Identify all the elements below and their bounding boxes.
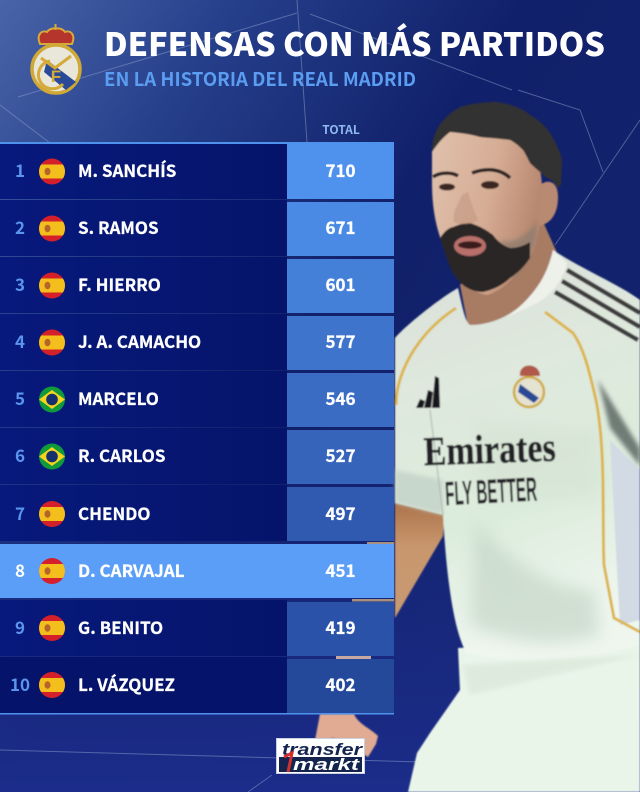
subtitle: EN LA HISTORIA DEL REAL MADRID bbox=[104, 65, 416, 92]
beard bbox=[440, 223, 530, 292]
row 1: 710 bbox=[325, 157, 356, 182]
row 6 bbox=[0, 428, 394, 484]
sleeve seam bbox=[430, 410, 443, 515]
row 6: 6 bbox=[15, 442, 25, 467]
stubble bbox=[500, 222, 537, 280]
row 4: J. A. CAMACHO bbox=[78, 328, 201, 353]
adidas logo bbox=[416, 376, 440, 408]
row 3: F. HIERRO bbox=[78, 271, 161, 296]
shoulder stripes bbox=[555, 270, 640, 340]
jersey trim bbox=[396, 308, 640, 632]
row 10: 402 bbox=[325, 671, 356, 696]
row 7: 7 bbox=[15, 500, 25, 525]
nose shadow bbox=[454, 192, 478, 224]
ear bbox=[536, 182, 558, 226]
row 1: M. SANCHÍS bbox=[78, 157, 176, 182]
row 3 bbox=[0, 257, 394, 313]
row 9: 419 bbox=[325, 614, 356, 639]
row 4: 577 bbox=[325, 328, 356, 353]
crown bbox=[39, 24, 73, 44]
row 8: highlighted bbox=[0, 544, 394, 598]
eyes bbox=[439, 184, 455, 190]
collar bbox=[505, 250, 567, 318]
transfermarkt logo bbox=[276, 738, 364, 774]
row 9: 9 bbox=[15, 614, 25, 639]
row 1: 1 bbox=[15, 157, 25, 182]
title: DEFENSAS CON MÁS PARTIDOS bbox=[104, 20, 605, 66]
neck bbox=[460, 215, 558, 326]
row 3: 3 bbox=[15, 271, 25, 296]
ranking table bbox=[0, 142, 394, 714]
row 6: R. CARLOS bbox=[78, 442, 166, 467]
row 7: CHENDO bbox=[78, 500, 150, 525]
row 9 bbox=[0, 600, 394, 656]
eyebrows bbox=[433, 170, 510, 178]
row 2 bbox=[0, 200, 394, 256]
row 7 bbox=[0, 485, 394, 541]
row 10: 10 bbox=[10, 671, 30, 696]
row 8: highlighted: 451 bbox=[325, 557, 356, 582]
row 5 bbox=[0, 371, 394, 427]
sleeve shading bbox=[395, 470, 443, 515]
row 5: MARCELO bbox=[78, 385, 159, 410]
row 2: S. RAMOS bbox=[78, 214, 159, 239]
hair bbox=[432, 102, 562, 188]
column heading: total: TOTAL bbox=[322, 121, 360, 138]
row 4: 4 bbox=[15, 328, 25, 353]
jersey bbox=[395, 250, 640, 660]
row 3: 601 bbox=[325, 271, 356, 296]
jersey soft shading bbox=[470, 520, 600, 642]
player photo bbox=[315, 102, 640, 792]
crest: Real Madrid logo: F bbox=[51, 67, 61, 86]
row 8: highlighted: D. CARVAJAL bbox=[78, 557, 185, 582]
row 10: L. VÁZQUEZ bbox=[78, 671, 175, 696]
jersey crest bbox=[514, 366, 544, 407]
sponsor: Emirates bbox=[423, 424, 556, 474]
shorts bbox=[408, 640, 640, 792]
row 8: highlighted: 8 bbox=[15, 557, 25, 582]
transfermarkt logo: transfer bbox=[282, 740, 364, 759]
arm bbox=[395, 498, 445, 618]
row 2: 2 bbox=[15, 214, 25, 239]
row 1 bbox=[0, 143, 394, 199]
row 4 bbox=[0, 314, 394, 370]
row 9: G. BENITO bbox=[78, 614, 163, 639]
head bbox=[432, 120, 542, 295]
mouth bbox=[454, 236, 486, 256]
row 2: 671 bbox=[325, 214, 356, 239]
row 10 bbox=[0, 657, 394, 713]
hand bbox=[315, 714, 378, 757]
transfermarkt logo: markt bbox=[293, 755, 361, 774]
crest: Real Madrid logo bbox=[32, 24, 80, 93]
row 6: 527 bbox=[325, 442, 356, 467]
row 5: 5 bbox=[15, 385, 25, 410]
row 7: 497 bbox=[325, 500, 356, 525]
row 5: 546 bbox=[325, 385, 356, 410]
side panel and shadow bbox=[610, 440, 640, 625]
